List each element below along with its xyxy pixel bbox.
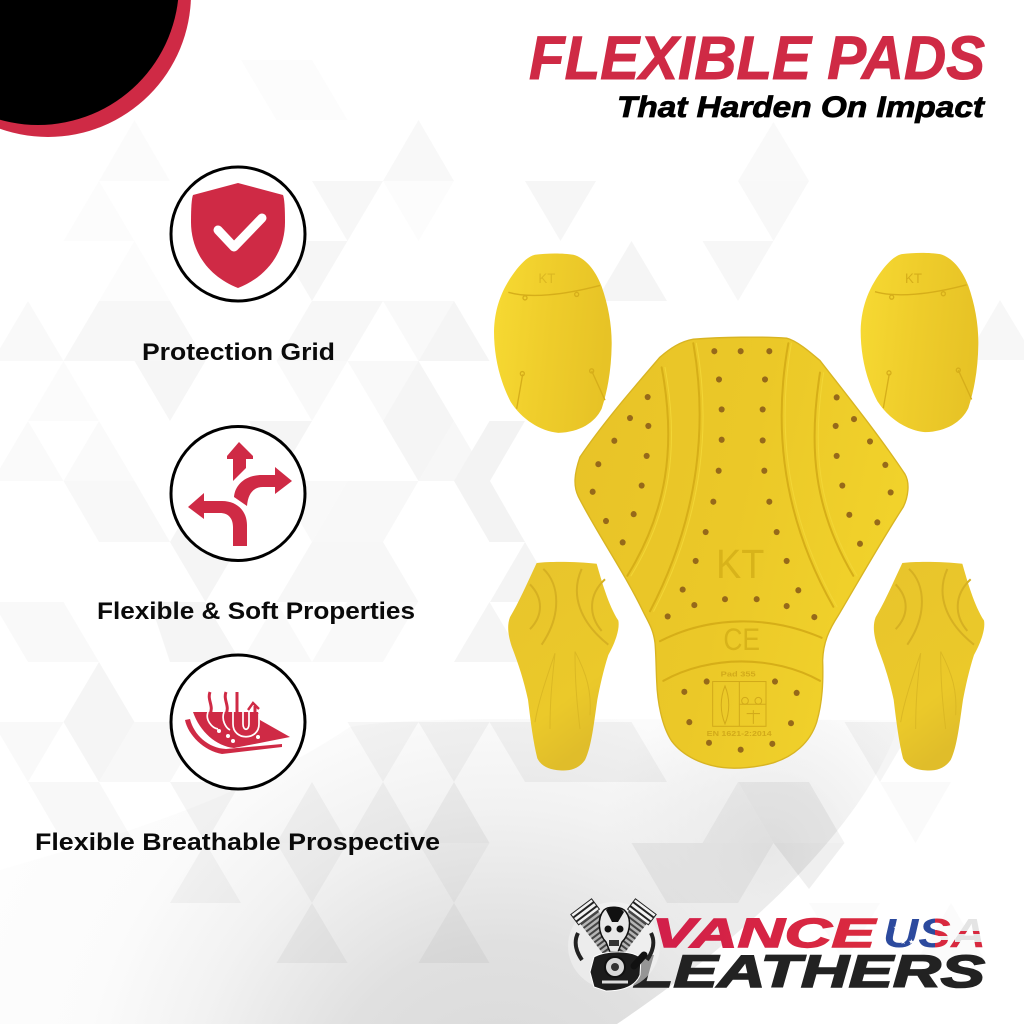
right elbow pad (874, 562, 984, 771)
back protector pad: CE (723, 621, 760, 657)
right shoulder pad: KT (905, 271, 922, 286)
left shoulder pad: KT (538, 271, 555, 286)
back protector pad (575, 337, 908, 768)
left elbow pad (508, 562, 619, 771)
label: flexible and soft: Flexible & Soft Properties (97, 598, 415, 625)
logo engine skull (568, 899, 660, 991)
label: protection grid: Protection Grid (142, 339, 335, 366)
title: That Harden On Impact (617, 91, 986, 124)
title: FLEXIBLE PADS (529, 24, 985, 92)
logo word USA with flag fill: ★ ★ (893, 924, 908, 932)
logo word VANCE: VANCE (652, 910, 878, 956)
icon: flexible arrows (171, 426, 305, 560)
back protector pad: EN 1621-2:2014 (707, 729, 773, 738)
corner badge: black circle with red ring (0, 0, 191, 137)
back protector pad: Pad 355 (721, 670, 756, 679)
logo word LEATHERS: LEATHERS (633, 946, 985, 997)
logo word USA with flag fill (886, 918, 982, 948)
product: yellow protective pads (494, 253, 984, 771)
logo word USA with flag fill: ★ ★ (900, 938, 914, 946)
logo word USA with flag fill: USA (883, 910, 986, 956)
back protector pad: KT (716, 543, 764, 587)
title (529, 24, 986, 124)
icon: breathable layers (171, 655, 305, 789)
logo: Vance Leathers USA (568, 899, 989, 997)
label: flexible breathable: Flexible Breathable Prospective (35, 829, 440, 856)
right shoulder pad (861, 253, 978, 432)
icon: protection shield (171, 167, 305, 301)
left shoulder pad (494, 254, 612, 433)
